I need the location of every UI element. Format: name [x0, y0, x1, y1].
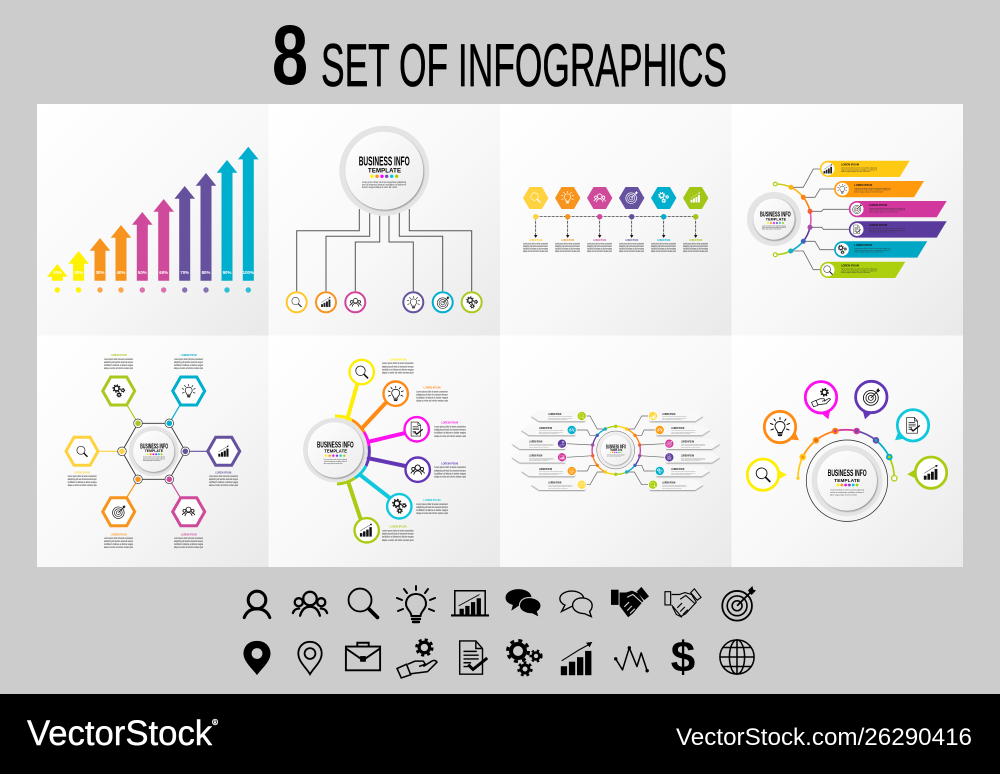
hub circle: TEMPLATE	[610, 449, 623, 452]
banner captions: LOREM IPSUM	[681, 453, 694, 457]
brand logo text: ®	[212, 718, 218, 727]
banner captions: LOREM IPSUM	[671, 426, 684, 430]
speech bubble 5	[895, 410, 929, 441]
banner captions: LOREM IPSUM	[671, 467, 684, 471]
icon: gears	[508, 640, 542, 676]
banner captions: LOREM IPSUM	[539, 467, 552, 471]
hub circle: BUSINESS INFO	[760, 209, 791, 218]
banner icon circles	[557, 411, 674, 489]
icon: outline pin	[298, 642, 322, 674]
bubble captions	[382, 357, 466, 542]
timeline arrowheads	[534, 235, 697, 238]
hexagons	[523, 187, 708, 209]
banner captions: LOREM IPSUM	[662, 481, 675, 485]
hexagon captions: LOREM IPSUM	[74, 470, 90, 474]
icon: light bulb	[397, 586, 435, 622]
hub circle	[806, 440, 888, 521]
connector lines	[297, 209, 472, 291]
colored arc	[775, 184, 811, 255]
icon circles	[287, 292, 482, 312]
timeline captions: LOREM IPSUM	[625, 238, 638, 242]
timeline captions: LOREM IPSUM	[529, 238, 542, 242]
speech bubble 3	[805, 382, 837, 419]
percent labels: 90%	[223, 270, 231, 275]
hub circle: BUSINESS INFO	[140, 443, 168, 450]
hexagon captions: LOREM IPSUM	[111, 353, 127, 357]
hub circle	[747, 192, 801, 246]
colored ring	[592, 426, 640, 474]
hub circle: TEMPLATE	[368, 168, 401, 174]
banner icons	[559, 413, 672, 487]
hexagon captions	[68, 353, 238, 549]
panel: hub with icon circles	[268, 104, 500, 336]
ring nodes	[591, 425, 641, 476]
icon bubbles	[350, 360, 430, 542]
hub circle: TEMPLATE	[145, 449, 164, 453]
percent labels: 30%	[96, 270, 104, 275]
icon: growth chart	[561, 642, 592, 675]
bubble captions: LOREM IPSUM	[390, 525, 406, 529]
arc segments	[798, 430, 894, 478]
title words: SET OF INFOGRAPHICS	[321, 32, 727, 99]
banner 4	[849, 221, 947, 238]
percent labels: 50%	[138, 270, 147, 275]
icon set, row 1	[244, 586, 756, 622]
hub circle: TEMPLATE	[766, 218, 787, 222]
hexagon captions: LOREM IPSUM	[181, 532, 197, 536]
arrow dots	[55, 287, 251, 293]
bubble captions: LOREM IPSUM	[424, 385, 440, 389]
title	[272, 8, 727, 102]
banner 6	[820, 262, 905, 278]
arc nodes	[773, 182, 812, 257]
connector lines	[791, 169, 849, 270]
banner 2	[834, 181, 924, 197]
panel: slanted banners	[732, 104, 963, 336]
banner 6: LOREM IPSUM	[841, 264, 859, 268]
hexagon nodes	[118, 419, 190, 484]
banner 2: LOREM IPSUM	[854, 183, 873, 187]
panel: growth arrows	[37, 104, 268, 336]
speech bubble 1	[747, 459, 787, 490]
percent labels	[53, 270, 254, 275]
panel: radial bubbles	[268, 336, 500, 567]
banner 3	[849, 201, 947, 217]
hub circle	[339, 126, 429, 216]
hub circle: BUSINESS INFO	[606, 444, 626, 450]
speech bubble 6	[907, 457, 947, 488]
icon: document check	[460, 641, 487, 674]
inner hexagon	[122, 423, 185, 479]
banner captions: LOREM IPSUM	[539, 426, 552, 430]
percent labels: 100%	[243, 270, 254, 275]
banner captions: LOREM IPSUM	[529, 440, 542, 444]
timeline captions	[523, 238, 708, 253]
icon: globe	[720, 640, 754, 674]
icon: laptop chart	[451, 591, 489, 615]
panel: hexagon timeline	[500, 104, 732, 336]
timeline captions: LOREM IPSUM	[657, 238, 670, 242]
icon: team	[293, 592, 327, 616]
icon set, row 2	[244, 633, 754, 682]
title numeral: 8	[272, 8, 308, 102]
icon: target	[722, 586, 756, 621]
image url: VectorStock.com/26290416	[676, 724, 972, 751]
percent labels: 40%	[117, 270, 125, 275]
spokes	[98, 405, 207, 497]
hexagon captions: LOREM IPSUM	[111, 532, 127, 536]
banner captions: LOREM IPSUM	[548, 412, 561, 416]
icon: filled chat	[505, 589, 541, 617]
percent labels: 10%	[53, 270, 62, 275]
banner captions: LOREM IPSUM	[681, 440, 694, 444]
hub circle: BUSINESS INFO	[359, 154, 410, 168]
arc behind hub	[335, 416, 369, 484]
panel: arc with speech bubbles	[732, 336, 963, 567]
hub circle	[303, 418, 368, 482]
bubble captions: LOREM IPSUM	[390, 357, 406, 361]
arc nodes	[796, 428, 897, 481]
hub circle	[129, 426, 179, 476]
banner captions	[529, 412, 706, 489]
arrow bars	[47, 147, 259, 281]
bubble captions: LOREM IPSUM	[424, 498, 440, 502]
bubble captions: LOREM IPSUM	[441, 421, 458, 425]
icon: filled pin	[244, 641, 270, 675]
timeline captions: LOREM IPSUM	[561, 238, 574, 242]
outer hexagons	[66, 377, 240, 526]
panel: ring with arrow banners	[500, 336, 732, 567]
speech bubble 2	[764, 411, 799, 443]
hub circle: TEMPLATE	[324, 448, 347, 454]
banner 5: LOREM IPSUM	[854, 243, 873, 247]
bubble captions: LOREM IPSUM	[441, 461, 458, 465]
banner 3: LOREM IPSUM	[869, 203, 887, 207]
banner 1: LOREM IPSUM	[841, 162, 859, 166]
icon: filled handshake	[611, 587, 649, 617]
icon: outline handshake	[665, 589, 701, 617]
brand logo text: VectorStock	[27, 714, 214, 753]
banner captions: LOREM IPSUM	[662, 412, 675, 416]
percent labels: 80%	[202, 270, 210, 275]
icon: person	[244, 591, 270, 618]
hub circle: BUSINESS INFO	[317, 440, 354, 450]
percent labels: 70%	[180, 270, 189, 275]
timeline captions: LOREM IPSUM	[593, 238, 606, 242]
banner captions: LOREM IPSUM	[529, 453, 542, 457]
banner 4: LOREM IPSUM	[869, 223, 887, 227]
panel: hexagon network	[37, 336, 268, 567]
dashed timeline	[536, 217, 696, 236]
icon: briefcase	[346, 643, 380, 670]
speech bubble 4	[856, 381, 887, 419]
footer band	[0, 694, 1000, 774]
icon: zigzag line	[614, 646, 649, 672]
hexagon captions: LOREM IPSUM	[215, 470, 231, 474]
hub circle: TEMPLATE	[834, 478, 860, 483]
percent labels: 20%	[74, 270, 83, 275]
banner 5	[834, 241, 927, 258]
hexagon captions: LOREM IPSUM	[181, 353, 197, 357]
banner captions: LOREM IPSUM	[548, 481, 561, 485]
grey banners	[512, 411, 720, 490]
banner 1	[820, 161, 910, 177]
hub circle	[597, 431, 635, 469]
icon: magnifier	[349, 589, 377, 617]
icon: outline chat	[560, 591, 592, 617]
timeline nodes	[533, 214, 698, 219]
stalks	[347, 385, 405, 518]
hub circle: BUSINESS INFO	[828, 468, 867, 479]
connectors	[567, 416, 665, 485]
icon: dollar sign: $	[671, 633, 695, 682]
timeline captions: LOREM IPSUM	[689, 238, 702, 242]
percent labels: 60%	[159, 270, 168, 275]
icon: hand with gear	[397, 640, 437, 678]
